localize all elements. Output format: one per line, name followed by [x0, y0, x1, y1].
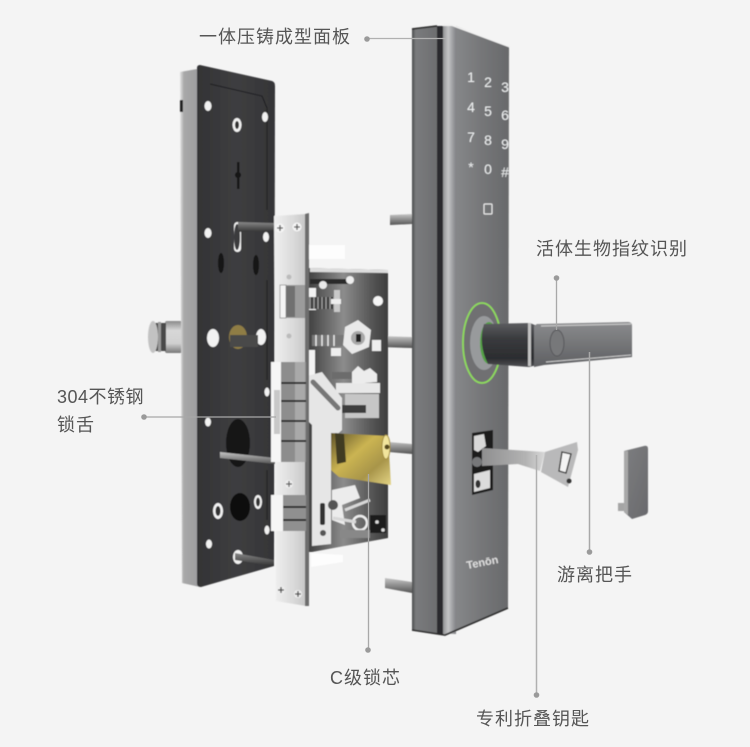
lock body mechanism — [307, 245, 391, 567]
cam plate with slot — [307, 372, 342, 546]
callout: fingerprint: 活体生物指纹识别 — [536, 239, 688, 259]
callout: folding key — [476, 455, 590, 729]
callout: stainless bolt: 锁舌 — [57, 415, 95, 435]
plate silver side strip — [180, 69, 200, 587]
panel side — [412, 26, 437, 634]
handle end cap — [618, 446, 648, 519]
mortise faceplate — [271, 213, 309, 606]
keypad digits: 6 — [501, 107, 509, 123]
brass cylinder — [331, 433, 391, 485]
callout: detachable handle — [557, 352, 633, 585]
keypad digits: * — [468, 159, 474, 175]
faceplate screws — [276, 222, 302, 598]
handle — [463, 303, 632, 383]
folding key — [482, 442, 578, 487]
panel highlight strip — [443, 26, 456, 634]
back mounting plate — [180, 65, 275, 587]
304 stainless deadbolts — [271, 362, 306, 531]
left knob — [148, 321, 182, 353]
callout: C-grade cylinder: C级锁芯 — [330, 668, 401, 688]
callout: die-cast panel: 一体压铸成型面板 — [199, 27, 351, 47]
lock case — [307, 268, 388, 552]
callout: die-cast panel — [199, 27, 446, 47]
keypad digits: 5 — [484, 103, 492, 119]
callout: C-grade cylinder — [330, 474, 401, 688]
lever — [534, 322, 632, 367]
keypad digits: 8 — [484, 132, 492, 148]
springs and gears — [308, 276, 381, 418]
callout: folding key: 专利折叠钥匙 — [476, 709, 590, 729]
plate black face — [197, 65, 275, 587]
keypad digits: 2 — [484, 74, 492, 90]
brand logo: Tenōn — [465, 554, 500, 572]
fingerprint sensor — [550, 330, 564, 356]
lower gears — [311, 485, 386, 567]
keypad digits: 4 — [467, 99, 475, 115]
front panel — [412, 25, 510, 635]
plate holes — [204, 101, 270, 564]
callout: stainless bolt — [57, 387, 276, 435]
white gaps beside case — [307, 288, 316, 386]
card sensor icon — [484, 204, 492, 214]
key cutout — [472, 430, 493, 495]
keypad digits: 1 — [467, 69, 475, 85]
lock artwork — [148, 25, 648, 635]
callout: detachable handle: 游离把手 — [557, 565, 633, 585]
connecting rods — [220, 214, 412, 593]
keypad digits: 7 — [467, 129, 475, 145]
keypad digits: # — [501, 164, 509, 180]
handle neck — [482, 323, 537, 367]
keypad digits: 0 — [484, 161, 492, 177]
green ring — [463, 303, 501, 383]
keypad digits: 9 — [501, 136, 509, 152]
upper latch — [280, 285, 305, 318]
panel face — [456, 26, 509, 631]
keypad digits: 3 — [501, 79, 509, 95]
callout: fingerprint — [536, 239, 688, 330]
keypad digits — [467, 69, 509, 180]
callout: stainless bolt: 304不锈钢 — [57, 387, 144, 407]
